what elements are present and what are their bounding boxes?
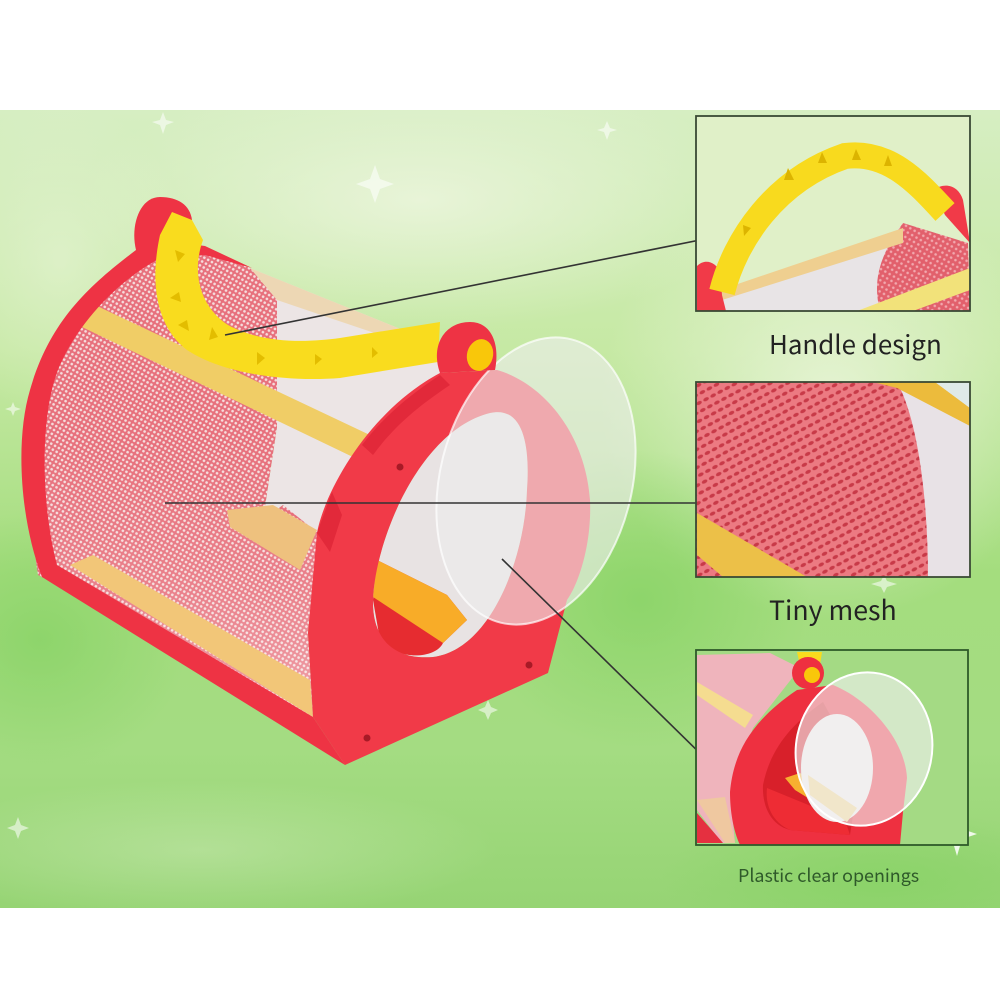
handle knob (437, 322, 496, 373)
leader line: mesh (165, 502, 720, 504)
caption: plastic clear openings: Plastic clear openings (738, 862, 919, 888)
inset: handle design (696, 116, 970, 311)
product: insect cage (21, 197, 664, 765)
clear lens (408, 316, 664, 646)
cage mesh body (31, 245, 318, 717)
white see-through mesh region (250, 268, 445, 535)
leader line: openings (502, 559, 713, 766)
yellow strips (82, 305, 372, 458)
inset: tiny mesh (696, 382, 970, 577)
caption: handle design: Handle design (769, 325, 942, 362)
yellow handle (155, 212, 440, 379)
caption: tiny mesh: Tiny mesh (769, 589, 897, 628)
front plate (308, 370, 590, 765)
back knob (134, 197, 192, 262)
top mesh band (250, 268, 440, 350)
leader line: handle (225, 237, 715, 335)
back frame and bottom rail (21, 240, 345, 765)
inset: plastic clear openings (696, 650, 968, 845)
hole contents (373, 412, 528, 657)
